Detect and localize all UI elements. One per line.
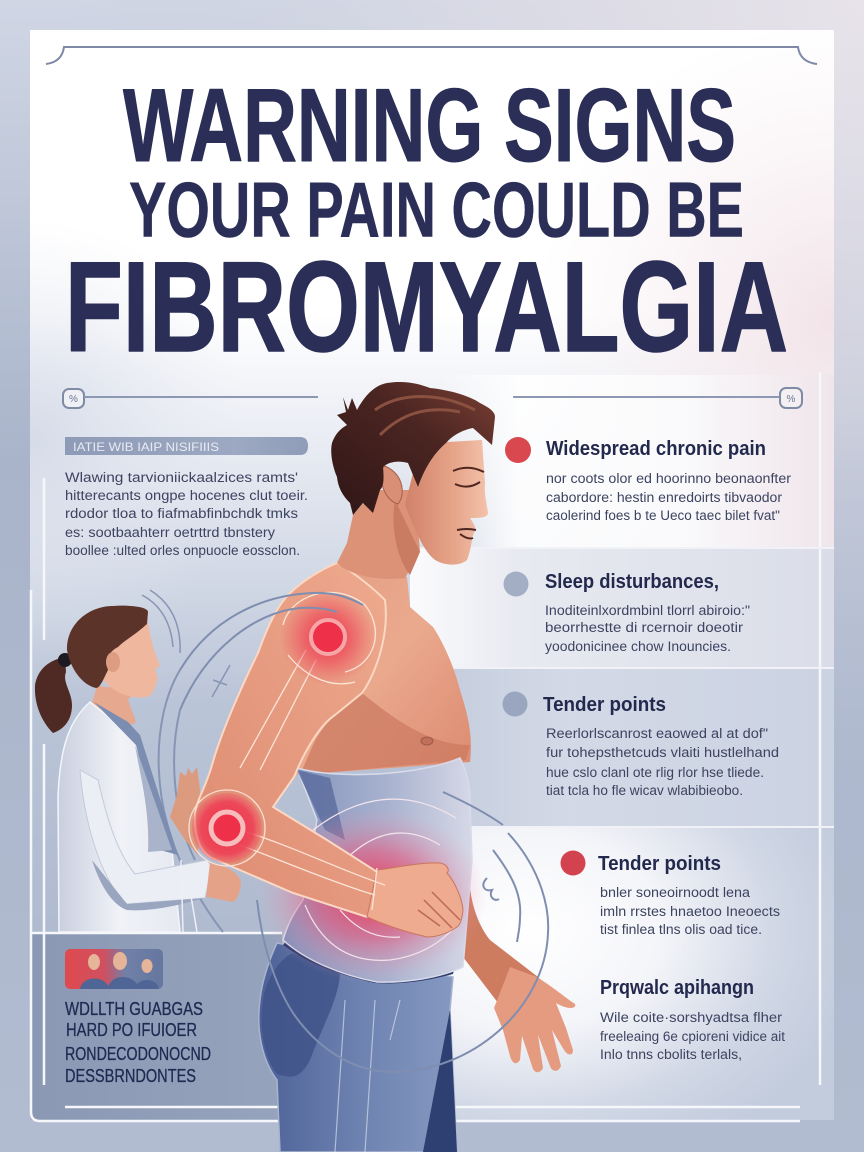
doctor coat body (58, 702, 180, 932)
thumbnail of three people (65, 949, 163, 989)
chest shadow (300, 693, 470, 775)
doctor coat shadow (135, 745, 172, 852)
description: tist finlea tlns olis oad tice. (600, 922, 762, 937)
shoulder glow (280, 589, 376, 685)
doctor shirt strip (94, 702, 178, 855)
description (600, 885, 780, 937)
doctor neck (92, 686, 137, 730)
bullet red (560, 850, 586, 876)
pants dark leg (423, 1010, 457, 1152)
heading: Sleep disturbances, (545, 571, 719, 593)
intro paragraph: hitterecants ongpe hocenes clut toeir. (65, 488, 308, 503)
item: widespread chronic pain (505, 437, 792, 523)
left intro block (65, 437, 308, 558)
frame lines (31, 372, 834, 1121)
intro paragraph: rdodor tloa to fiafmabfinbchdk tmks (65, 506, 298, 521)
label bar: IATIE WIB IAIP NISIFIIIS (73, 440, 219, 454)
description: Wile coite·sorshyadtsa flher (600, 1010, 783, 1025)
caption: DESSBRNDONTES (65, 1066, 196, 1086)
doctor sleeve shadow (92, 860, 205, 910)
description: tiat tcla ho fle wicav wlabibieobo. (546, 783, 743, 798)
hair highlights (375, 396, 475, 435)
title (65, 68, 788, 379)
arm lines (240, 650, 385, 910)
neck (337, 490, 420, 579)
item: tender points (502, 692, 779, 798)
elbow glow (189, 790, 265, 866)
bottom left block (65, 949, 211, 1086)
doctor hair tie (58, 653, 72, 667)
doctor ponytail (35, 657, 72, 733)
waistband (283, 938, 455, 983)
nipple (421, 737, 433, 745)
description: Reerlorlscanrost eaowed al at dof" (546, 726, 768, 741)
description: caolerind foes b te Ueco taec bilet fvat" (546, 508, 780, 523)
rings behind figure (142, 590, 230, 932)
far hand (494, 967, 575, 1072)
bullet grey (504, 572, 528, 596)
caption: WDLLTH GUABGAS (65, 999, 203, 1019)
bullet red (505, 437, 531, 463)
caption (65, 999, 211, 1086)
doctor sleeve (80, 770, 212, 904)
far arm (463, 888, 538, 1012)
heading: Tender points (598, 853, 721, 875)
hair (331, 382, 495, 515)
neck shadow (393, 500, 420, 575)
heading: Widespread chronic pain (546, 438, 766, 460)
description: fur tohepsthetcuds vlaiti hustlelhand (546, 745, 779, 760)
description: bnler soneoirnoodt lena (600, 885, 751, 900)
description (600, 1010, 785, 1062)
central figure (189, 382, 575, 1152)
panel: lower right background (440, 828, 834, 1120)
divider with icon: right: % (787, 394, 796, 405)
wrap dark fold (297, 770, 345, 840)
intro paragraph: es: sootbaahterr oetrttrd tbnstery (65, 525, 275, 540)
description: Inlo tnns cbolits terlals, (600, 1047, 742, 1062)
wrap (283, 758, 472, 982)
doctor illustration (35, 606, 241, 932)
caption: RONDECODONOCND (65, 1044, 211, 1064)
intro paragraph (65, 470, 308, 558)
arm (195, 563, 386, 917)
description: Inoditeinlxordmbinl tlorrl abiroio:" (545, 603, 750, 618)
intro paragraph: Wlawing tarvioniickaalzices ramts' (65, 470, 298, 485)
item: tender points second (560, 850, 780, 937)
description: imln rrstes hnaetoo Ineoects (600, 904, 780, 919)
hand on belly (367, 863, 463, 937)
doctor hair (67, 606, 148, 688)
description: hue cslo clanl ote rlig rlor hse tliede. (546, 765, 764, 780)
pants (259, 943, 457, 1152)
ear (381, 466, 402, 504)
description: freeleaing 6e cpioreni vidice ait (600, 1029, 785, 1044)
divider with icon: left (63, 389, 318, 408)
item: sleep disturbances (504, 571, 750, 654)
panel: bottom left background (32, 933, 282, 1120)
face (405, 440, 488, 565)
description (545, 603, 750, 654)
divider with icon: left: % (69, 394, 78, 405)
description: beorrhestte di rcernoir doeotir (545, 620, 744, 635)
heading: Tender points (543, 694, 666, 716)
bullet grey (502, 692, 528, 716)
description: nor coots olor ed hoorinno beonaonfter (546, 471, 792, 486)
divider with icon: right (513, 388, 802, 408)
panel: widespread chronic pain background (440, 375, 834, 547)
description: yoodonicinee chow Inouncies. (545, 639, 731, 654)
doctor hand (206, 862, 241, 902)
description (546, 726, 779, 798)
doctor coat seams (181, 860, 197, 932)
intro paragraph: boollee :ulted orles onpuocle eossclon. (65, 543, 300, 558)
caption: HARD PO IFUIOER (66, 1020, 197, 1040)
heading: Prqwalc apihangn (600, 977, 754, 999)
panel: sleep disturbances background (410, 549, 834, 667)
item: prawalc apihangn (600, 977, 785, 1062)
doctor face (100, 621, 160, 698)
description: cabordore: hestin enredoirts tibvaodor (546, 490, 783, 505)
doctor far hand (170, 767, 200, 855)
doctor ear (106, 652, 120, 672)
torso (292, 563, 471, 775)
rings over figure (180, 593, 548, 1072)
label bar (65, 437, 308, 455)
belly glow (257, 807, 487, 983)
pants seam lines (335, 1000, 400, 1152)
pants thigh shadow (262, 953, 340, 1077)
description (546, 471, 792, 523)
panel: tender points background (450, 669, 834, 826)
top frame line (46, 47, 817, 64)
brow, eye and mouth (453, 468, 484, 538)
hand fingers (418, 892, 460, 928)
belly arcs (305, 799, 457, 960)
